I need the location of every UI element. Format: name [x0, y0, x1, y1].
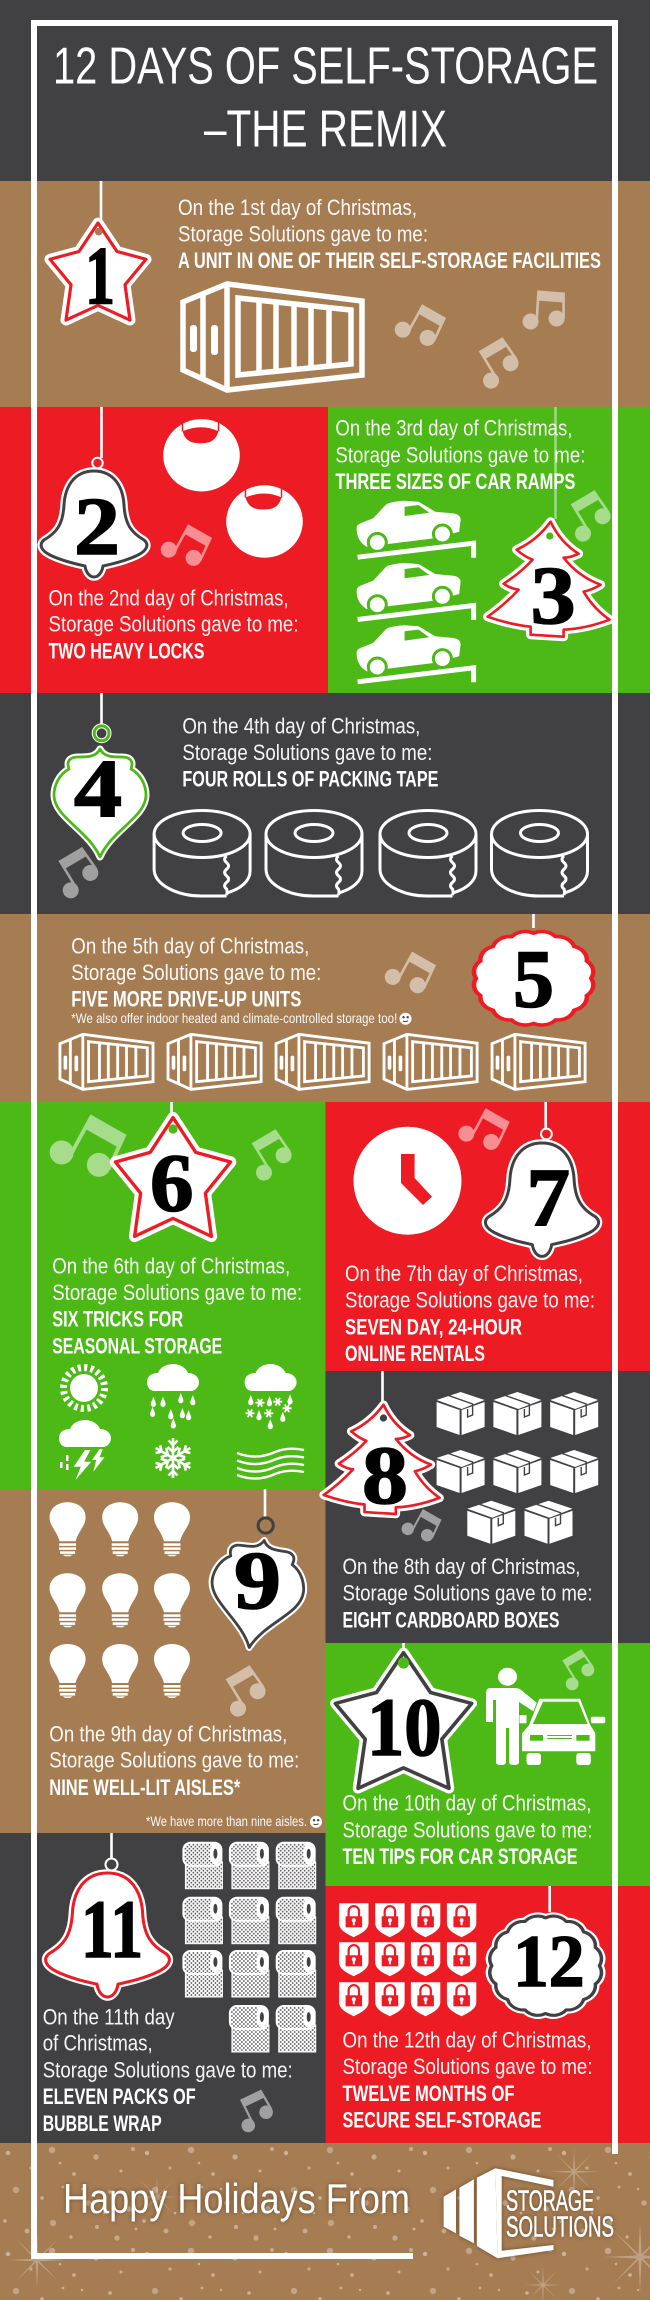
icon: cardboard boxes	[437, 1392, 598, 1544]
text: day 5: On the 5th day of Christmas,	[71, 933, 309, 958]
text: day 4: Storage Solutions gave to me:	[182, 740, 432, 765]
text: day 2: TWO HEAVY LOCKS	[48, 638, 204, 663]
text: day 4	[182, 713, 438, 792]
panel: footer	[0, 2143, 650, 2300]
text: day 11: BUBBLE WRAP	[43, 2111, 162, 2136]
ornament: bell 11	[46, 1833, 169, 1997]
text: day 7: ONLINE RENTALS	[345, 1341, 485, 1366]
icon: wind	[237, 1449, 304, 1479]
icon: two locks	[163, 418, 303, 558]
text: day 10	[342, 1791, 592, 1869]
ornament: seal 12: 12	[513, 1921, 585, 2003]
ornament: star 10	[335, 1643, 472, 1788]
text: day 8: Storage Solutions gave to me:	[342, 1581, 592, 1606]
icon: music note	[382, 945, 437, 999]
ornament: star 6	[115, 1102, 231, 1236]
ornament: bell 2	[41, 407, 147, 577]
icon: five storage units	[60, 1034, 585, 1089]
icon: music note	[553, 1648, 598, 1693]
icon: sun	[64, 1368, 104, 1408]
icon: snow cloud	[245, 1364, 297, 1429]
text: day 8: EIGHT CARDBOARD BOXES	[342, 1607, 560, 1632]
text: day 9: Storage Solutions gave to me:	[49, 1748, 299, 1773]
text: day 7: SEVEN DAY, 24-HOUR	[345, 1314, 522, 1339]
text: day 5	[71, 933, 321, 1012]
icon: music note	[46, 845, 103, 901]
ornament: bell 7: 7	[526, 1151, 570, 1243]
text: day 12: SECURE SELF-STORAGE	[342, 2108, 542, 2133]
text: day 1: Storage Solutions gave to me:	[178, 222, 428, 246]
text: day 8: On the 8th day of Christmas,	[342, 1554, 580, 1579]
text: day 11: Storage Solutions gave to me:	[43, 2057, 293, 2082]
ornament: star 1	[50, 181, 146, 321]
ornament: ball 4	[54, 693, 146, 857]
panel: day 9	[0, 1489, 326, 1833]
text: day 3: Storage Solutions gave to me:	[335, 442, 585, 467]
ornament: tree 3: 3	[531, 549, 576, 641]
text: day 5: FIVE MORE DRIVE-UP UNITS	[71, 987, 301, 1012]
text: day 11: of Christmas,	[43, 2031, 153, 2056]
text: day 12	[342, 2028, 592, 2133]
ornament: ball 9: 9	[234, 1534, 281, 1626]
icon: music notes	[392, 290, 565, 392]
ornament: bell 11: 11	[81, 1883, 143, 1975]
ornament: seal 5	[474, 914, 593, 1025]
icon: light bulbs	[50, 1502, 190, 1698]
icon: clock	[354, 1127, 462, 1235]
icon: music note	[559, 489, 615, 545]
text: day 9: NINE WELL-LIT AISLES*	[49, 1775, 240, 1800]
icon: tape rolls	[154, 810, 588, 896]
text: day 4: On the 4th day of Christmas,	[182, 713, 420, 738]
text: day 2: On the 2nd day of Christmas,	[48, 586, 288, 611]
title: –THE REMIX	[204, 101, 447, 159]
ornament: star 6: 6	[150, 1137, 194, 1229]
ornament: star 1: 1	[85, 229, 115, 321]
panel: header	[0, 0, 650, 181]
panel: day 3	[328, 407, 650, 693]
title	[53, 37, 598, 159]
logo: Storage Solutions: STORAGE	[506, 2186, 594, 2218]
icon: rain cloud	[147, 1364, 199, 1428]
text: day 7	[345, 1261, 595, 1366]
icon: music notes	[46, 1105, 296, 1185]
text: day 7: Storage Solutions gave to me:	[345, 1287, 595, 1312]
text: day 10: On the 10th day of Christmas,	[342, 1791, 592, 1816]
ornament: seal 5: 5	[513, 933, 554, 1025]
text: day 9	[49, 1722, 299, 1800]
ornament: tree 3	[488, 407, 610, 641]
text: day 12: TWELVE MONTHS OF	[342, 2081, 514, 2106]
ornament: tree 8	[324, 1371, 440, 1521]
panel: day 2	[0, 407, 328, 693]
logo: Storage Solutions	[444, 2168, 614, 2258]
text: day 9: On the 9th day of Christmas,	[49, 1722, 287, 1747]
panel: day 6	[0, 1102, 326, 1489]
icon: music note	[214, 1664, 270, 1720]
ornament: ball 9	[204, 1489, 310, 1654]
text: day 12: Storage Solutions gave to me:	[342, 2054, 592, 2079]
text: day 1	[178, 195, 601, 273]
text: day 3	[335, 416, 585, 494]
text: day 11	[43, 2004, 293, 2136]
text: day 8	[342, 1554, 592, 1632]
text: day 2	[48, 586, 298, 663]
icon: music note	[399, 1504, 442, 1546]
text: day 2: Storage Solutions gave to me:	[48, 612, 298, 637]
icon: snowflake	[153, 1438, 193, 1478]
note: climate-controlled storage: *We also offer indoor heated and climate-controlled storage too!	[71, 1010, 397, 1026]
panel: day 1	[0, 181, 650, 407]
ornament: star 10: 10	[367, 1681, 442, 1773]
ornament: ball 4: 4	[74, 742, 122, 834]
icon: music note	[456, 1102, 510, 1155]
text: day 10: Storage Solutions gave to me:	[342, 1817, 592, 1842]
ornament: seal 12	[490, 1886, 601, 2015]
icon: music note	[158, 518, 213, 571]
text: day 4: FOUR ROLLS OF PACKING TAPE	[182, 767, 438, 792]
icon: music note	[229, 2088, 277, 2135]
panel: day 11	[0, 1833, 326, 2143]
text: day 1: On the 1st day of Christmas,	[178, 195, 417, 220]
panel: day 10	[326, 1643, 650, 1886]
icon: bubble wrap rolls	[183, 1843, 316, 2052]
panel: day 8	[324, 1371, 650, 1643]
text: day 12: On the 12th day of Christmas,	[342, 2028, 592, 2053]
panel: day 7	[326, 1102, 650, 1371]
icon: storage unit	[183, 284, 362, 390]
text: day 7: On the 7th day of Christmas,	[345, 1261, 583, 1286]
panel: day 4	[0, 693, 650, 914]
text: day 3: On the 3rd day of Christmas,	[335, 416, 572, 441]
text: day 5: Storage Solutions gave to me:	[71, 960, 321, 985]
icon: cars on ramps	[357, 501, 474, 682]
text: day 6: Storage Solutions gave to me:	[52, 1280, 302, 1305]
icon: storm cloud	[59, 1420, 111, 1480]
ornament: bell 2: 2	[74, 480, 120, 572]
footer text: Happy Holidays From	[63, 2175, 410, 2222]
text: day 11: On the 11th day	[43, 2004, 175, 2029]
icon: shield locks	[339, 1903, 476, 2016]
text: day 11: ELEVEN PACKS OF	[43, 2084, 196, 2109]
text: day 6: SEASONAL STORAGE	[52, 1333, 222, 1358]
text: day 6: On the 6th day of Christmas,	[52, 1253, 290, 1278]
text: day 6	[52, 1253, 302, 1358]
icon: man with car	[486, 1668, 605, 1765]
text: day 6: SIX TRICKS FOR	[52, 1307, 183, 1332]
ornament: tree 8: 8	[362, 1429, 408, 1521]
panel: day 12	[326, 1886, 650, 2143]
panel: day 5	[0, 914, 650, 1102]
ornament: bell 7	[485, 1102, 599, 1256]
note: more aisles: *We have more than nine aisles.	[146, 1813, 307, 1829]
